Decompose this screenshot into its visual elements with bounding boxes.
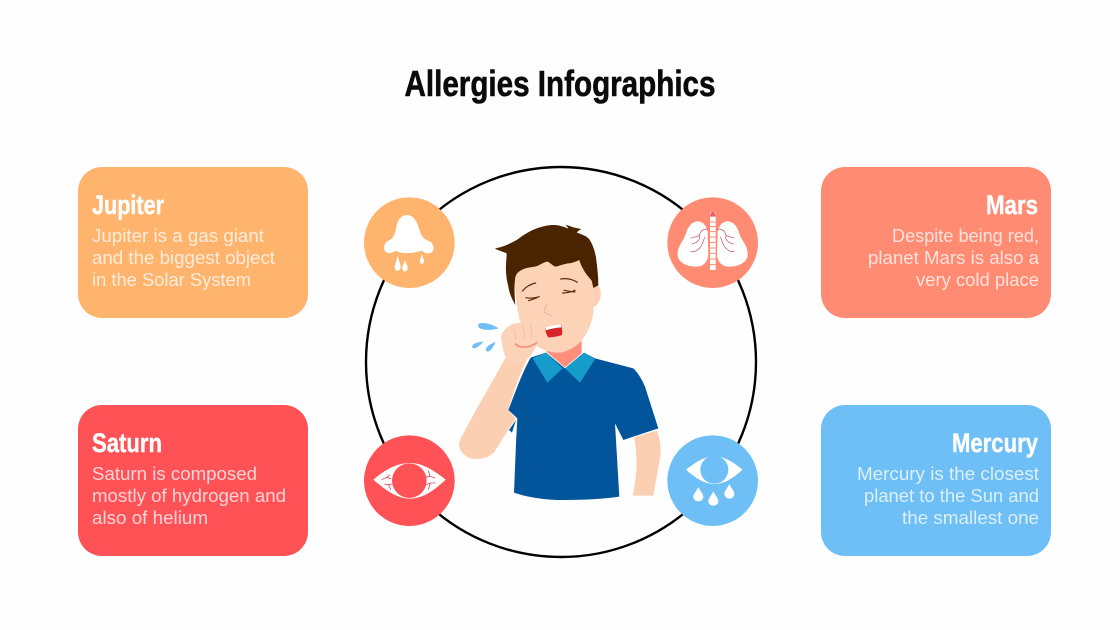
central ring bbox=[366, 167, 756, 557]
text: Saturn description bbox=[92, 463, 286, 528]
text: Saturn description: also of helium bbox=[92, 507, 208, 528]
text: Saturn description: mostly of hydrogen and bbox=[92, 485, 286, 506]
eyebrows and closed eyes bbox=[522, 279, 577, 301]
icon: watery eye bbox=[667, 435, 758, 526]
forearm bbox=[459, 358, 527, 459]
text: Jupiter description: and the biggest object bbox=[92, 247, 275, 268]
heading: Mars: Mars bbox=[986, 190, 1038, 220]
text: Mercury description bbox=[857, 463, 1039, 528]
panel: Mars bbox=[821, 167, 1051, 318]
text: Mars description: very cold place bbox=[916, 269, 1039, 290]
text: Jupiter description: Jupiter is a gas giant bbox=[92, 225, 264, 246]
panel: Mercury bbox=[821, 405, 1051, 556]
fist bbox=[501, 323, 539, 364]
panel: Jupiter bbox=[78, 167, 308, 318]
droplets bbox=[472, 323, 499, 352]
heading: Mercury: Mercury bbox=[952, 428, 1038, 458]
icon: runny nose bbox=[364, 197, 455, 288]
collar bbox=[533, 353, 595, 383]
hair bbox=[495, 225, 598, 305]
text: Saturn description: Saturn is composed bbox=[92, 463, 257, 484]
title: Allergies Infographics bbox=[404, 63, 716, 104]
text: Mercury description: planet to the Sun and bbox=[864, 485, 1039, 506]
text: Jupiter description bbox=[92, 225, 275, 290]
text: Mars description: Despite being red, bbox=[892, 225, 1039, 246]
shirt bbox=[508, 353, 658, 500]
text: Mars description bbox=[868, 225, 1040, 290]
nose bbox=[544, 304, 552, 316]
face bbox=[515, 253, 594, 353]
mouth bbox=[545, 324, 562, 337]
ear bbox=[593, 284, 601, 307]
heading: Jupiter: Jupiter bbox=[92, 190, 164, 220]
icon: red eye bbox=[364, 435, 455, 526]
right lower arm bbox=[633, 431, 661, 496]
text: Mercury description: the smallest one bbox=[902, 507, 1039, 528]
text: Mercury description: Mercury is the closest bbox=[857, 463, 1039, 484]
neck bbox=[547, 337, 582, 367]
panel: Saturn bbox=[78, 405, 308, 556]
heading: Saturn: Saturn bbox=[92, 428, 162, 458]
icon: lungs bbox=[667, 197, 758, 288]
text: Mars description: planet Mars is also a bbox=[868, 247, 1040, 268]
illustration: coughing man bbox=[459, 225, 661, 500]
text: Jupiter description: in the Solar System bbox=[92, 269, 251, 290]
